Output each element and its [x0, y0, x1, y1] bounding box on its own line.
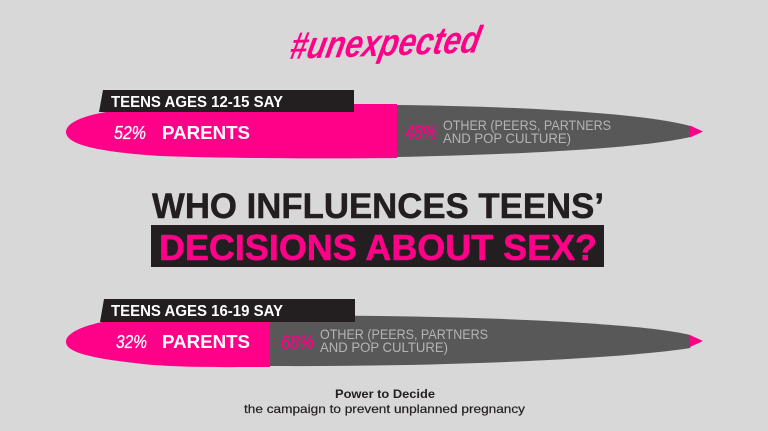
other label: [320, 327, 488, 355]
footer credit: [244, 387, 525, 416]
heading highlight box: [151, 225, 604, 267]
age label banner: [100, 299, 355, 322]
age label banner: TEENS AGES 16-19 SAY: [111, 303, 284, 320]
pen tip: [690, 126, 703, 138]
other label: AND POP CULTURE): [443, 131, 571, 146]
main heading: [151, 187, 604, 268]
panel: teens ages 12-15 pen chart: [66, 90, 703, 158]
52% value: 52%: [114, 123, 146, 143]
panel: teens ages 16-19 pen chart: [66, 299, 703, 367]
parents label: PARENTS: [162, 332, 250, 352]
other label: AND POP CULTURE): [320, 340, 448, 355]
heading line 1: WHO INFLUENCES TEENS’: [152, 187, 604, 226]
heading line 2: DECISIONS ABOUT SEX?: [159, 227, 597, 268]
age label banner: [99, 90, 354, 112]
48% value: 48%: [405, 122, 437, 144]
pen segment: other 68%: [270, 316, 692, 366]
other label: OTHER (PEERS, PARTNERS: [443, 118, 611, 133]
68% value: 68%: [281, 332, 314, 354]
pen segment: parents 32%: [66, 315, 270, 367]
footer credit: Power to Decide: [335, 387, 435, 401]
32% value: 32%: [116, 332, 147, 352]
pen segment: parents 52%: [66, 104, 397, 158]
other label: OTHER (PEERS, PARTNERS: [320, 327, 488, 342]
other label: [443, 118, 611, 146]
pen tip: [690, 335, 703, 347]
age label banner: TEENS AGES 12-15 SAY: [111, 94, 284, 111]
pen segment: other 48%: [397, 105, 692, 157]
parents label: PARENTS: [162, 123, 250, 143]
footer credit: the campaign to prevent unplanned pregnancy: [244, 402, 525, 416]
hashtag title: #unexpected: [286, 19, 486, 68]
